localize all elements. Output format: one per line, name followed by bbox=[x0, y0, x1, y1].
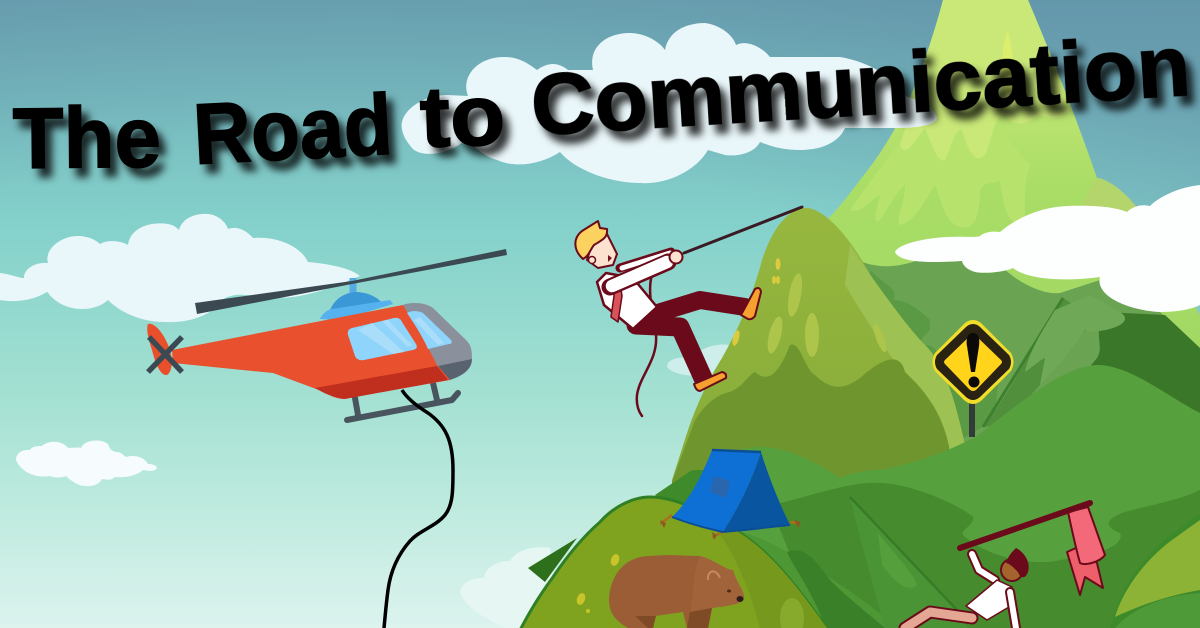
torso bbox=[966, 580, 1012, 620]
band under tent bbox=[735, 530, 900, 628]
climbing rope bbox=[684, 207, 802, 253]
front leg bbox=[636, 325, 703, 378]
word: to: to bbox=[418, 67, 507, 166]
upper arm bbox=[620, 252, 671, 268]
cloud: right white bbox=[895, 185, 1200, 312]
darker left drape bbox=[870, 270, 1000, 440]
tail rotor cross bbox=[148, 337, 182, 372]
yellow dots bbox=[731, 258, 780, 347]
icon: brown bear bbox=[609, 555, 744, 628]
lighter ridge drips bbox=[1025, 295, 1125, 385]
word: Communication: Communication bbox=[528, 18, 1193, 154]
ribbon lower tail bbox=[1067, 547, 1103, 595]
tail rotor blade bbox=[147, 324, 172, 375]
rotor mast bbox=[350, 278, 356, 296]
icon: warning sign bbox=[932, 320, 1014, 437]
right lighter band bbox=[845, 245, 965, 452]
word: The: The bbox=[12, 90, 161, 187]
slope below dark line bbox=[850, 497, 968, 628]
cloud: left large bbox=[0, 214, 360, 322]
climber figure bbox=[575, 207, 802, 416]
dark ridge shadow bbox=[983, 298, 1097, 427]
upper snowcap drips bbox=[900, 0, 1070, 161]
hair bbox=[1006, 548, 1029, 577]
other arm bbox=[1010, 592, 1016, 628]
mouth bbox=[608, 255, 612, 262]
hair bbox=[575, 221, 607, 259]
shirt bbox=[597, 273, 657, 329]
dark right side bbox=[1075, 312, 1200, 415]
word: Road: Road bbox=[191, 77, 395, 183]
title bbox=[12, 18, 1193, 187]
tie bbox=[611, 282, 622, 322]
rotor dome bbox=[330, 292, 385, 310]
fuselage bbox=[172, 304, 450, 399]
leaf highlights bbox=[765, 272, 889, 357]
belly shade bbox=[315, 366, 448, 399]
lower dark olive bbox=[672, 344, 950, 495]
cloud: top centre bbox=[402, 23, 937, 183]
hand bbox=[670, 250, 682, 264]
skid bar bbox=[347, 393, 458, 420]
cloud: faint behind climber bbox=[667, 345, 730, 376]
helicopter bbox=[147, 249, 507, 420]
mountain: back lime peak bbox=[825, 0, 1200, 420]
shoes bbox=[741, 288, 761, 319]
front window bbox=[407, 311, 452, 349]
mountain: lower-left olive hill bbox=[515, 470, 835, 628]
side window bbox=[348, 318, 417, 360]
raised arm bbox=[972, 554, 995, 580]
mountain: olive foreground peak bbox=[672, 208, 965, 495]
black rope bbox=[384, 390, 453, 628]
front arm bbox=[610, 262, 668, 287]
head bbox=[1001, 559, 1023, 581]
landing skids bbox=[355, 383, 437, 415]
face bbox=[587, 234, 617, 268]
icon: blue tent bbox=[660, 450, 801, 540]
yellow dots bbox=[575, 553, 621, 613]
flag pole bbox=[960, 503, 1090, 548]
dangling rope bbox=[637, 275, 656, 416]
cloud: lower behind hill bbox=[460, 547, 560, 628]
ribbon upper bbox=[1068, 507, 1105, 564]
flag bearer figure bbox=[905, 503, 1105, 628]
mountain: front green hill bbox=[660, 365, 1200, 628]
legs bbox=[905, 612, 972, 628]
mountain: middle green bbox=[850, 255, 1200, 460]
mid drips bbox=[850, 125, 1030, 228]
rear leg bbox=[648, 300, 745, 316]
lower dark green band bbox=[770, 483, 1200, 628]
nose grey bbox=[403, 303, 472, 367]
main rotor bbox=[195, 249, 507, 314]
mountain: bottom right olive hill bbox=[1110, 513, 1200, 628]
dark triangle ledge bbox=[528, 538, 577, 582]
cloud: small left bbox=[16, 441, 157, 486]
right hump bbox=[1070, 178, 1150, 240]
yellow highlight bbox=[1002, 30, 1013, 95]
